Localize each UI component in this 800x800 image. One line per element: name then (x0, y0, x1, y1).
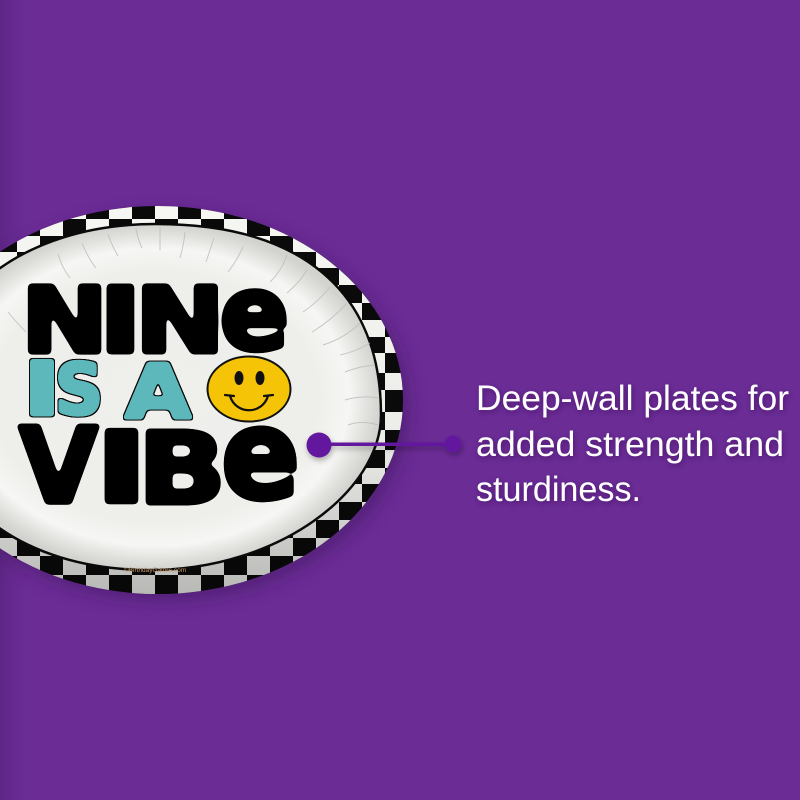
line: VIBE: I (94, 411, 149, 527)
line: NINE: N (21, 268, 108, 375)
icon: smiley (208, 356, 290, 422)
rim creases (8, 228, 378, 425)
checkered rim (0, 200, 410, 600)
plate well (0, 224, 381, 570)
copyright: ©BirthdayGalore.com (124, 566, 186, 574)
line: NINE: N (134, 267, 226, 374)
line: NINE (21, 252, 289, 375)
callout text: sturdiness. (476, 469, 641, 509)
callout text: added strength and (476, 424, 784, 464)
line: VIBE: V (19, 405, 98, 528)
line: VIBE (19, 381, 300, 528)
callout pointer (306, 432, 462, 458)
callout text (476, 378, 789, 509)
line: VIBE: B (137, 411, 227, 527)
line: IS A: A (125, 349, 192, 437)
callout text: Deep-wall plates for (476, 378, 789, 418)
title lettering (19, 252, 300, 528)
plate shadow (0, 213, 409, 601)
line: IS A: S (55, 350, 103, 431)
line: IS A (22, 345, 192, 437)
plate (0, 200, 410, 601)
line: NINE: e (220, 252, 289, 375)
line: IS A: I (22, 345, 62, 433)
line: NINE: I (98, 268, 143, 375)
line: VIBE: e (221, 381, 300, 528)
